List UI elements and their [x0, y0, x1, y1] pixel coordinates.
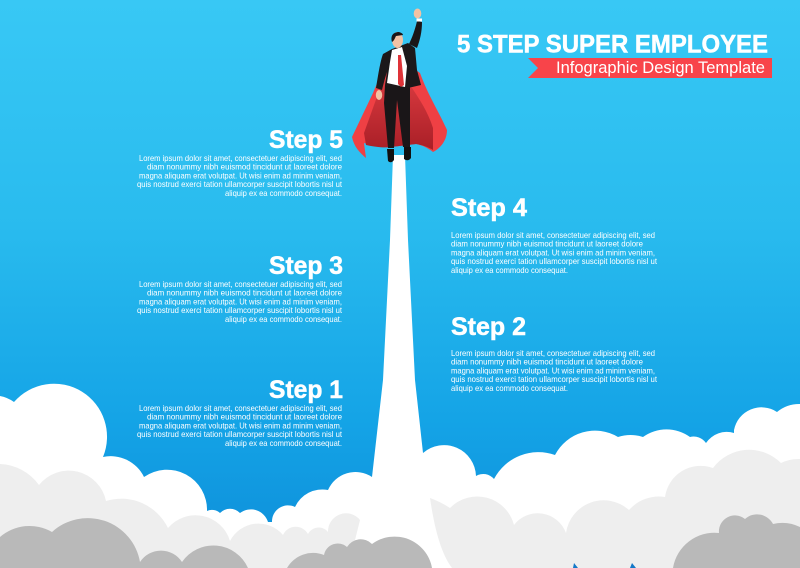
- red tie: [398, 55, 404, 87]
- shoes: [387, 147, 411, 162]
- subtitle ribbon: Infographic Design Template: [556, 59, 765, 77]
- white clouds and rocket smoke trail: [0, 155, 800, 568]
- fist: [414, 8, 421, 18]
- step 3 block: magna aliquam erat volutpat. Ut wisi enim ad minim veniam,: [139, 297, 342, 306]
- hair: [391, 32, 403, 42]
- step 1 block: [137, 376, 343, 448]
- hand: [376, 90, 382, 100]
- step 4 block: magna aliquam erat volutpat. Ut wisi enim ad minim veniam,: [451, 248, 655, 257]
- step 3 block: aliquip ex ea commodo consequat.: [225, 315, 342, 324]
- jacket: [376, 43, 421, 90]
- step 5 block: Lorem ipsum dolor sit amet, consectetuer adipiscing elit, sed: [139, 154, 342, 163]
- step 4 block: quis nostrud exerci tation ullamcorper suscipit lobortis nisl ut: [451, 257, 658, 266]
- step 4 block: Lorem ipsum dolor sit amet, consectetuer adipiscing elit, sed: [451, 231, 655, 240]
- step 3 block: [137, 252, 343, 324]
- step 5 block: quis nostrud exerci tation ullamcorper suscipit lobortis nisl ut: [137, 180, 343, 189]
- step 4 block: Step 4: [451, 194, 527, 222]
- raised arm: [409, 21, 422, 48]
- shirt cuff: [416, 18, 422, 22]
- title: 5 STEP SUPER EMPLOYEE: [457, 30, 768, 58]
- step 5 block: magna aliquam erat volutpat. Ut wisi enim ad minim veniam,: [139, 171, 342, 180]
- step 1 block: magna aliquam erat volutpat. Ut wisi enim ad minim veniam,: [139, 421, 342, 430]
- step 2 block: aliquip ex ea commodo consequat.: [451, 384, 568, 393]
- step 2 block: Step 2: [451, 313, 526, 341]
- cape: [352, 52, 447, 158]
- head: [392, 32, 403, 48]
- step 3 block: Step 3: [269, 252, 343, 280]
- step 5 block: aliquip ex ea commodo consequat.: [225, 189, 342, 198]
- light grey cloud layer: [0, 450, 800, 568]
- step 1 block: diam nonummy nibh euismod tincidunt ut laoreet dolore: [147, 413, 342, 422]
- superhero businessman: [352, 8, 447, 162]
- step 4 block: aliquip ex ea commodo consequat.: [451, 266, 568, 275]
- shirt: [387, 47, 407, 87]
- step 2 block: quis nostrud exerci tation ullamcorper suscipit lobortis nisl ut: [451, 375, 658, 384]
- step 2 block: magna aliquam erat volutpat. Ut wisi enim ad minim veniam,: [451, 366, 655, 375]
- step 3 block: Lorem ipsum dolor sit amet, consectetuer adipiscing elit, sed: [139, 280, 342, 289]
- blue gaps at bottom of clouds: [573, 563, 636, 568]
- step 1 block: quis nostrud exerci tation ullamcorper suscipit lobortis nisl ut: [137, 430, 343, 439]
- step 3 block: diam nonummy nibh euismod tincidunt ut laoreet dolore: [147, 289, 342, 298]
- step 4 block: diam nonummy nibh euismod tincidunt ut laoreet dolore: [451, 240, 643, 249]
- step 1 block: Lorem ipsum dolor sit amet, consectetuer adipiscing elit, sed: [139, 404, 342, 413]
- step 5 block: diam nonummy nibh euismod tincidunt ut laoreet dolore: [147, 163, 342, 172]
- step 4 block: [451, 194, 658, 275]
- trousers: [384, 85, 410, 148]
- step 3 block: quis nostrud exerci tation ullamcorper suscipit lobortis nisl ut: [137, 306, 343, 315]
- step 1 block: Step 1: [269, 376, 343, 404]
- step 2 block: diam nonummy nibh euismod tincidunt ut laoreet dolore: [451, 358, 643, 367]
- dark grey cloud layer: [0, 514, 800, 568]
- step 5 block: Step 5: [269, 126, 343, 154]
- step 1 block: aliquip ex ea commodo consequat.: [225, 439, 342, 448]
- step 2 block: Lorem ipsum dolor sit amet, consectetuer adipiscing elit, sed: [451, 349, 655, 358]
- step 5 block: [137, 126, 343, 198]
- step 2 block: [451, 313, 658, 393]
